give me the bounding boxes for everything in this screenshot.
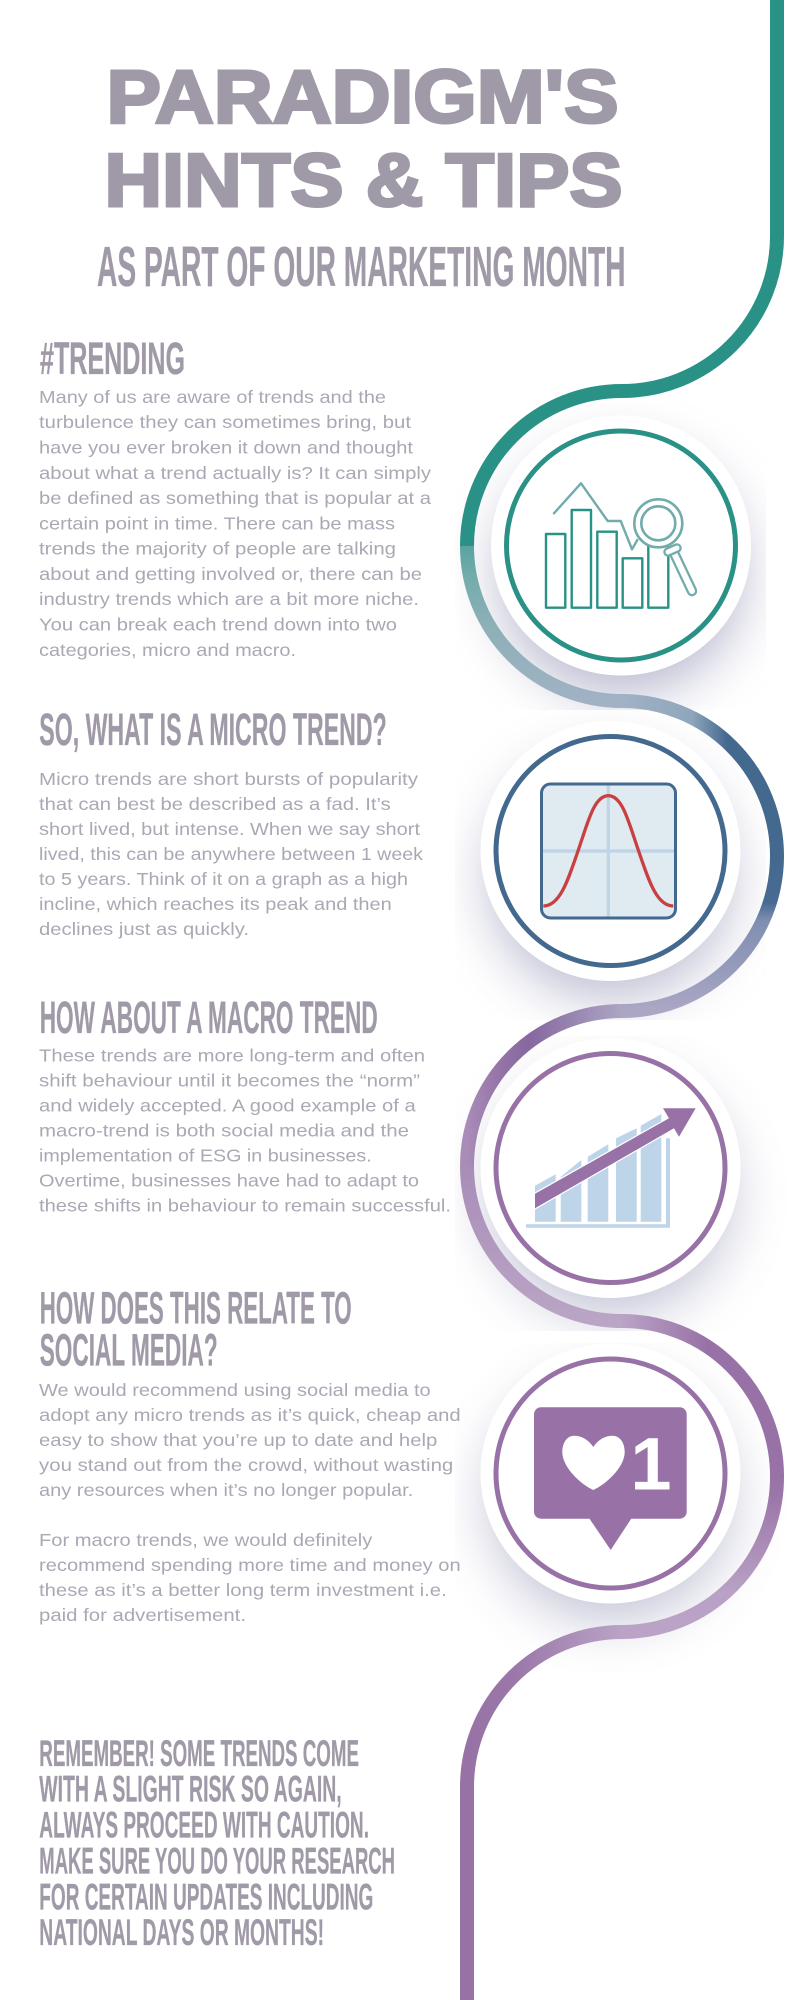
heading: trending: #TRENDING	[40, 333, 185, 384]
heading: social media: SOCIAL MEDIA?	[40, 1325, 218, 1376]
text block: micro trend body: short lived, but intense. When we say short	[39, 819, 420, 839]
text block: macro trend body: these shifts in behaviour to remain successful.	[39, 1196, 451, 1216]
icon: rising bar chart with arrow	[480, 1038, 740, 1298]
icon: bell curve graph	[480, 721, 740, 981]
panel: macro trend text	[39, 992, 451, 1216]
text block: social media body: easy to show that you’re up to date and help	[39, 1430, 437, 1450]
text block: trending body: certain point in time. There can be mass	[39, 514, 395, 534]
heading: social media	[40, 1282, 352, 1376]
icon: social like notification: 1	[630, 1422, 672, 1505]
title	[104, 54, 622, 222]
winding timeline path	[467, 0, 777, 2000]
text block: social media body: these as it’s a better long term investment i.e.	[39, 1580, 447, 1600]
panel: micro trend text	[39, 704, 423, 939]
callout: closing reminder: WITH A SLIGHT RISK SO AGAIN,	[39, 1769, 342, 1810]
text block: macro trend body: These trends are more long-term and often	[39, 1046, 425, 1066]
text block: micro trend body: Micro trends are short bursts of popularity	[39, 769, 418, 789]
text block: micro trend body: that can best be described as a fad. It’s	[39, 794, 391, 814]
callout: closing reminder: FOR CERTAIN UPDATES INCLUDING	[39, 1876, 373, 1917]
heading: macro trend: HOW ABOUT A MACRO TREND	[40, 992, 378, 1043]
text block: social media body: We would recommend using social media to	[39, 1380, 431, 1400]
callout: closing reminder	[39, 1733, 395, 1953]
title: HINTS & TIPS	[104, 138, 622, 222]
panel: social media text	[39, 1282, 461, 1625]
icon: bar chart with magnifier	[491, 416, 751, 676]
text block: social media body: any resources when it’s no longer popular.	[39, 1480, 413, 1500]
title: PARADIGM'S	[106, 54, 618, 138]
text block: trending body: Many of us are aware of trends and the	[39, 387, 386, 407]
text block: micro trend body: to 5 years. Think of it on a graph as a high	[39, 869, 408, 889]
text block: trending body: You can break each trend down into two	[39, 614, 397, 634]
text block: macro trend body: macro-trend is both social media and the	[39, 1121, 409, 1141]
text block: macro trend body: and widely accepted. A good example of a	[39, 1096, 416, 1116]
text block: micro trend body: incline, which reaches its peak and then	[39, 894, 392, 914]
text block: social media body	[39, 1380, 461, 1625]
text block: social media body: adopt any micro trends as it’s quick, cheap and	[39, 1405, 461, 1425]
text block: trending body: about and getting involved or, there can be	[39, 564, 422, 584]
text block: social media body: you stand out from the crowd, without wasting	[39, 1455, 453, 1475]
panel: trending text	[39, 333, 431, 660]
text block: social media body: For macro trends, we would definitely	[39, 1530, 373, 1550]
text block: micro trend body: declines just as quickly.	[39, 919, 249, 939]
text block: macro trend body: Overtime, businesses have had to adapt to	[39, 1171, 419, 1191]
text block: trending body: turbulence they can sometimes bring, but	[39, 412, 411, 432]
heading: micro trend: SO, WHAT IS A MICRO TREND?	[39, 704, 387, 755]
text block: macro trend body	[39, 1046, 451, 1216]
text block: macro trend body: implementation of ESG in businesses.	[39, 1146, 372, 1166]
text block: macro trend body: shift behaviour until it becomes the “norm”	[39, 1071, 420, 1091]
text block: trending body: categories, micro and macro.	[39, 640, 296, 660]
circle shadows	[488, 450, 743, 1621]
text block: social media body: recommend spending more time and money on	[39, 1555, 461, 1575]
text block: trending body: industry trends which are a bit more niche.	[39, 589, 419, 609]
icon: social like notification	[480, 1344, 740, 1604]
text block: trending body: be defined as something that is popular at a	[39, 488, 431, 508]
text block: trending body: about what a trend actually is? It can simply	[39, 463, 431, 483]
text block: trending body: have you ever broken it down and thought	[39, 438, 413, 458]
text block: trending body	[39, 387, 431, 660]
text block: micro trend body	[39, 769, 423, 939]
text block: trending body: trends the majority of people are talking	[39, 538, 396, 558]
callout: closing reminder: ALWAYS PROCEED WITH CAUTION.	[39, 1805, 369, 1846]
callout: closing reminder: NATIONAL DAYS OR MONTHS!	[39, 1912, 324, 1953]
panel: social media text: HOW DOES THIS RELATE TO	[40, 1282, 352, 1333]
text block: micro trend body: lived, this can be anywhere between 1 week	[39, 844, 423, 864]
callout: closing reminder: REMEMBER! SOME TRENDS COME	[39, 1733, 359, 1774]
text: MAKE SURE YOU DO YOUR RESEARCH	[39, 1840, 395, 1881]
text block: social media body: paid for advertisement.	[39, 1605, 246, 1625]
